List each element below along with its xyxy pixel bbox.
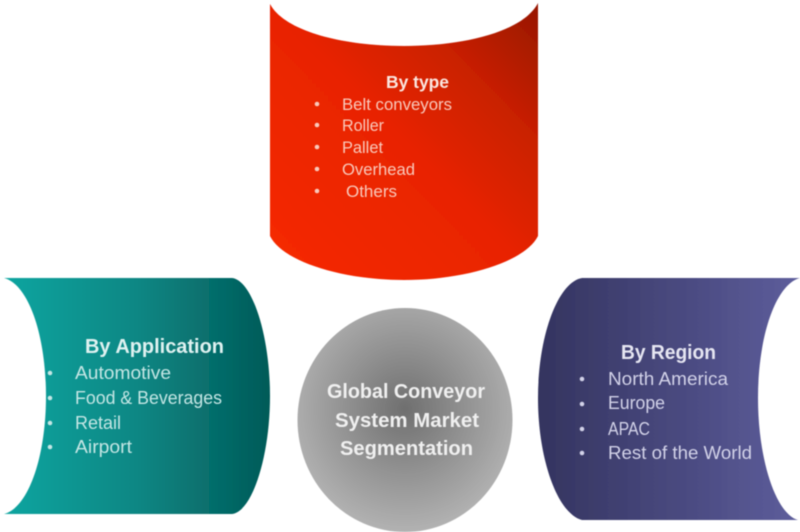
heading: by region: By Region xyxy=(621,342,716,364)
panel: center circle xyxy=(298,308,512,532)
list: type items: Belt conveyors xyxy=(342,95,452,114)
list: application items: Food & Beverages xyxy=(75,388,222,408)
panel: by type xyxy=(270,3,538,280)
list: type items: Roller xyxy=(342,116,384,135)
heading: by application: By Application xyxy=(85,336,224,358)
list: type items: Overhead xyxy=(342,160,415,179)
grey circle xyxy=(298,308,512,532)
purple curved shape xyxy=(538,278,800,520)
panel: by region xyxy=(538,278,800,520)
list: type items xyxy=(315,95,452,201)
teal curved shape xyxy=(4,278,270,514)
list: application items: Automotive xyxy=(75,363,171,383)
list: type items: Others xyxy=(346,182,397,201)
center title: Segmentation xyxy=(340,438,473,460)
center title: System Market xyxy=(335,410,479,432)
list: region items xyxy=(580,369,752,463)
heading: by type: By type xyxy=(386,72,449,92)
center title: Global Conveyor xyxy=(327,381,485,403)
list: type items: Pallet xyxy=(342,138,383,157)
list: application items: Retail xyxy=(75,413,121,433)
list: region items: APAC xyxy=(608,419,650,439)
list: region items: Europe xyxy=(608,393,665,413)
list: region items: Rest of the World xyxy=(608,443,752,463)
center title xyxy=(327,381,485,460)
list: application items: Airport xyxy=(75,437,132,457)
list: region items: North America xyxy=(608,369,729,389)
list: application items xyxy=(48,363,222,457)
panel: by application xyxy=(4,278,270,514)
red cylinder xyxy=(270,3,538,280)
